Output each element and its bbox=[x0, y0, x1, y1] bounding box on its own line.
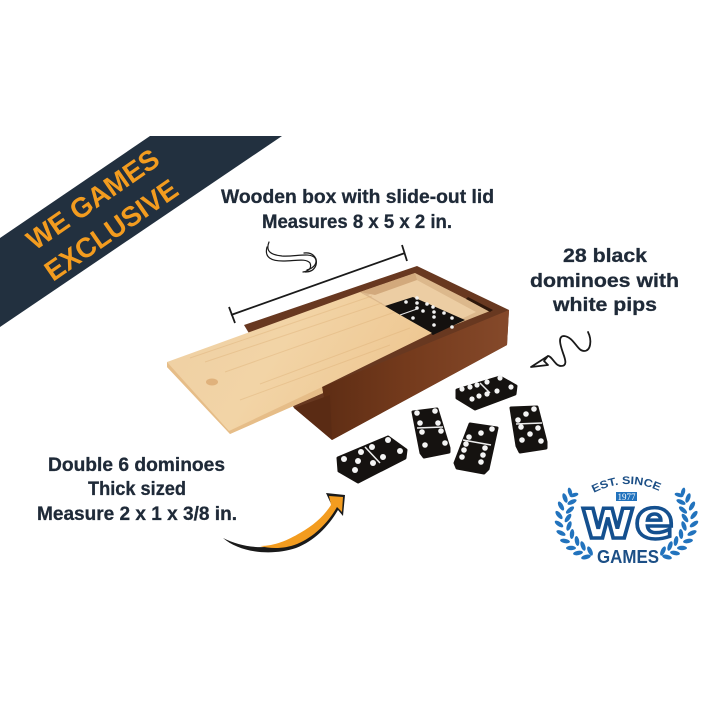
logo est. since arc text: EST. SINCE bbox=[591, 476, 662, 492]
banner: WE Games Exclusive: WE GAMES bbox=[21, 143, 165, 256]
logo 1977 badge: 1977 bbox=[618, 492, 636, 502]
wooden box with lid bbox=[167, 266, 509, 440]
text: domino size description: Double 6 dominoes bbox=[48, 455, 225, 476]
box front side bbox=[322, 310, 509, 440]
loose domino: far right bbox=[511, 406, 546, 452]
text: black dominoes description: 28 black bbox=[563, 246, 647, 267]
banner: WE Games Exclusive bbox=[0, 136, 282, 327]
text: black dominoes description: white pips bbox=[552, 295, 657, 316]
logo: WE Games bbox=[554, 476, 698, 567]
icon: wavy motion lines bbox=[266, 242, 316, 272]
text: box description: Measures 8 x 5 x 2 in. bbox=[262, 212, 452, 233]
dimension line: box length bbox=[229, 245, 407, 323]
box rim and back wall bbox=[244, 266, 509, 440]
text: box description: Wooden box with slide-out lid bbox=[221, 187, 494, 208]
text: domino size description: Measure 2 x 1 x 3/8 in. bbox=[37, 504, 237, 525]
box end grain edge bbox=[294, 395, 332, 440]
dominoes inside box bbox=[385, 296, 465, 335]
loose domino: front left bbox=[338, 437, 406, 482]
text: black dominoes description bbox=[530, 246, 679, 316]
text: box description bbox=[221, 187, 494, 233]
icon: orange curved arrow bbox=[223, 493, 345, 552]
loose domino: top flat bbox=[457, 375, 516, 409]
box interior bbox=[360, 273, 493, 334]
loose domino: centre tilted bbox=[455, 424, 497, 473]
lid finger notch bbox=[206, 378, 218, 386]
loose domino: centre upright bbox=[413, 408, 449, 457]
banner: WE Games Exclusive: EXCLUSIVE bbox=[39, 173, 184, 287]
text: black dominoes description: dominoes with bbox=[530, 271, 679, 292]
sliding lid bbox=[167, 292, 432, 434]
logo wreath left bbox=[554, 487, 594, 560]
logo wreath right bbox=[659, 487, 699, 560]
text: domino size description bbox=[37, 455, 237, 525]
logo we wordmark: we bbox=[581, 488, 674, 551]
text: domino size description: Thick sized bbox=[88, 479, 186, 500]
icon: squiggly arrow to dominoes bbox=[531, 332, 590, 367]
logo games text: GAMES bbox=[597, 547, 659, 567]
